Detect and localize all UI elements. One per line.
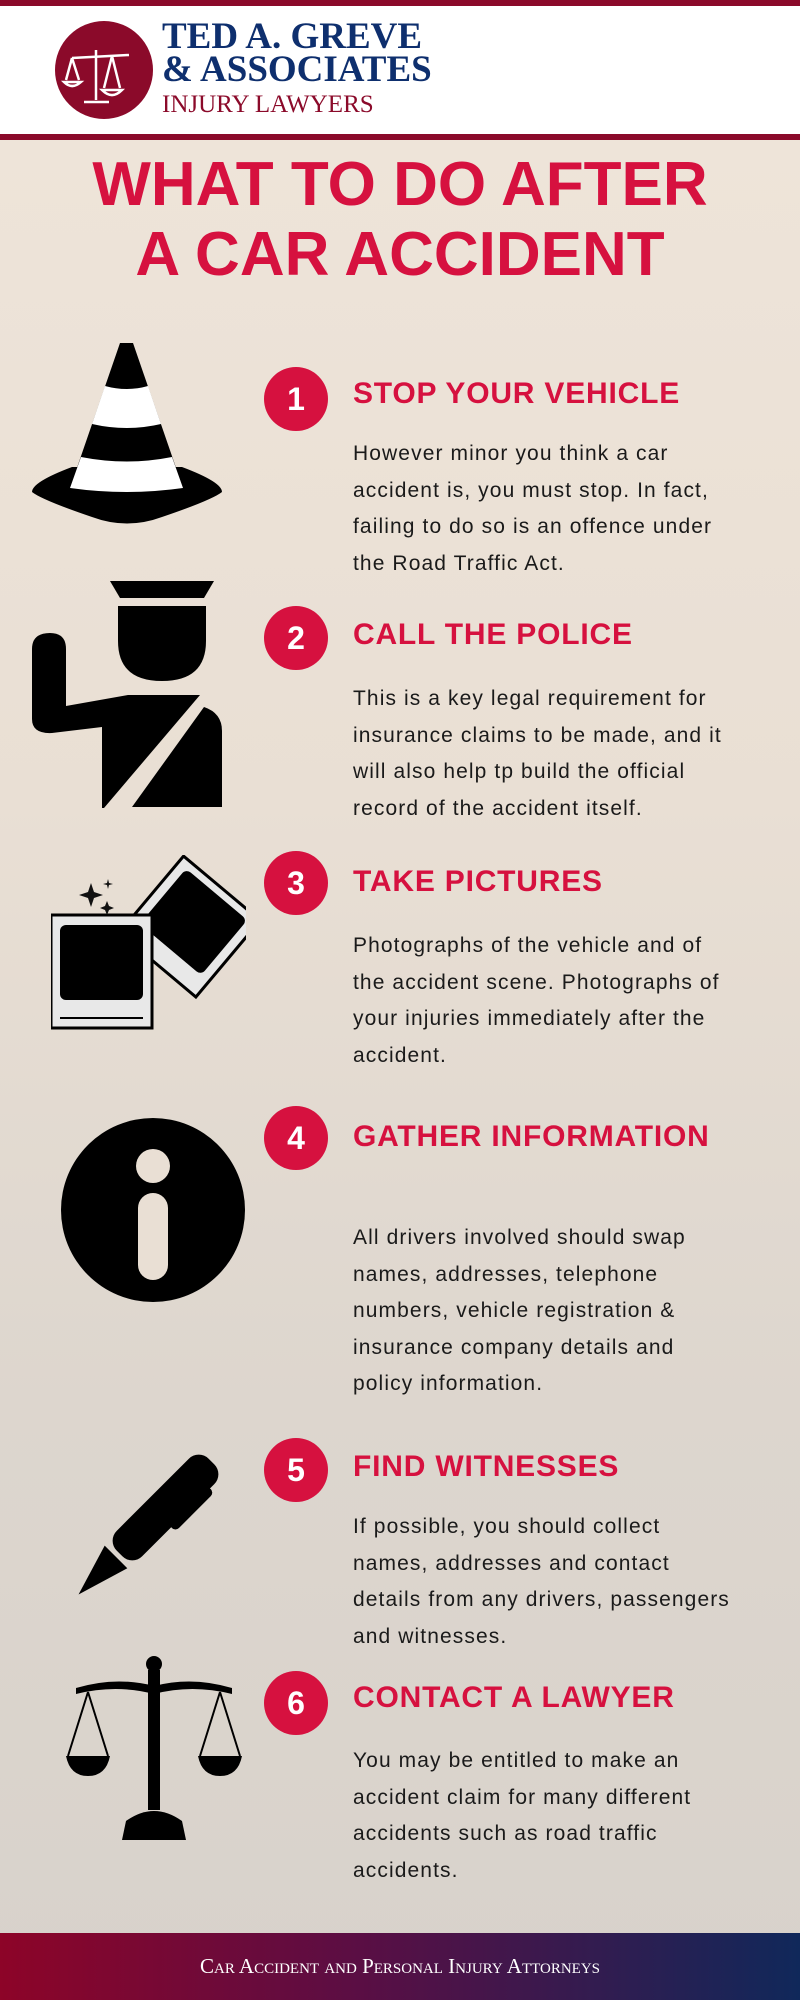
step 2: will also help tp build the official bbox=[353, 760, 685, 783]
step 6: accidents such as road traffic bbox=[353, 1822, 658, 1845]
step 6: 6 bbox=[287, 1685, 305, 1721]
step 5: If possible, you should collect bbox=[353, 1515, 660, 1538]
step 1: the Road Traffic Act. bbox=[353, 552, 565, 574]
step 1: STOP YOUR VEHICLE bbox=[353, 377, 680, 410]
step 4: numbers, vehicle registration & bbox=[353, 1299, 675, 1322]
header bbox=[0, 0, 800, 140]
step 1: 1 bbox=[287, 381, 305, 417]
step 3: 3 bbox=[287, 865, 305, 901]
step 4: policy information. bbox=[353, 1372, 543, 1395]
step 6: accident claim for many different bbox=[353, 1786, 691, 1808]
logo emblem bbox=[55, 21, 153, 119]
icon: information bbox=[61, 1118, 245, 1302]
footer: Car Accident and Personal Injury Attorneys bbox=[200, 1954, 600, 1978]
logo text: & ASSOCIATES bbox=[162, 49, 432, 90]
step 1: failing to do so is an offence under bbox=[353, 515, 712, 538]
step 5: and witnesses. bbox=[353, 1624, 507, 1648]
title bbox=[92, 150, 708, 289]
step 2 bbox=[264, 606, 722, 820]
step 5 bbox=[264, 1438, 730, 1648]
header: INJURY LAWYERS bbox=[162, 91, 374, 118]
step 3 bbox=[264, 851, 720, 1066]
step 6: accidents. bbox=[353, 1858, 459, 1882]
title: A CAR ACCIDENT bbox=[135, 220, 665, 289]
icon: traffic cone bbox=[32, 343, 222, 524]
logo text: TED A. GREVE bbox=[162, 16, 422, 57]
step 5: FIND WITNESSES bbox=[353, 1450, 619, 1483]
step 6: CONTACT A LAWYER bbox=[353, 1681, 675, 1714]
step 3: TAKE PICTURES bbox=[353, 865, 603, 898]
icon: photographs bbox=[51, 855, 246, 1030]
step 6: You may be entitled to make an bbox=[353, 1749, 679, 1772]
title: WHAT TO DO AFTER bbox=[92, 150, 708, 219]
step 1: However minor you think a car bbox=[353, 442, 669, 465]
step 4: GATHER INFORMATION bbox=[353, 1120, 710, 1153]
step 2: 2 bbox=[287, 620, 305, 656]
step 2: This is a key legal requirement for bbox=[353, 687, 707, 710]
icon: pen bbox=[78, 1454, 218, 1594]
icon: scales of justice bbox=[66, 1656, 242, 1840]
step 2: insurance claims to be made, and it bbox=[353, 724, 722, 746]
step 4 bbox=[264, 1106, 710, 1395]
step 1: accident is, you must stop. In fact, bbox=[353, 478, 709, 502]
step 3: your injuries immediately after the bbox=[353, 1007, 705, 1030]
step 4: insurance company details and bbox=[353, 1336, 674, 1358]
step 2: CALL THE POLICE bbox=[353, 618, 633, 651]
step 6 bbox=[264, 1671, 691, 1882]
step 5: 5 bbox=[287, 1452, 305, 1488]
step 4: All drivers involved should swap bbox=[353, 1226, 686, 1249]
icon: police officer bbox=[32, 581, 222, 808]
step 3: the accident scene. Photographs of bbox=[353, 970, 720, 994]
step 4: names, addresses, telephone bbox=[353, 1262, 658, 1286]
step 5: details from any drivers, passengers bbox=[353, 1588, 730, 1611]
logo text bbox=[162, 16, 432, 90]
step 1 bbox=[264, 367, 712, 574]
step 2: record of the accident itself. bbox=[353, 796, 643, 820]
footer bbox=[0, 1933, 800, 2000]
step 3: Photographs of the vehicle and of bbox=[353, 934, 702, 957]
step 5: names, addresses and contact bbox=[353, 1552, 670, 1574]
step 4: 4 bbox=[287, 1120, 305, 1156]
step 3: accident. bbox=[353, 1044, 447, 1066]
